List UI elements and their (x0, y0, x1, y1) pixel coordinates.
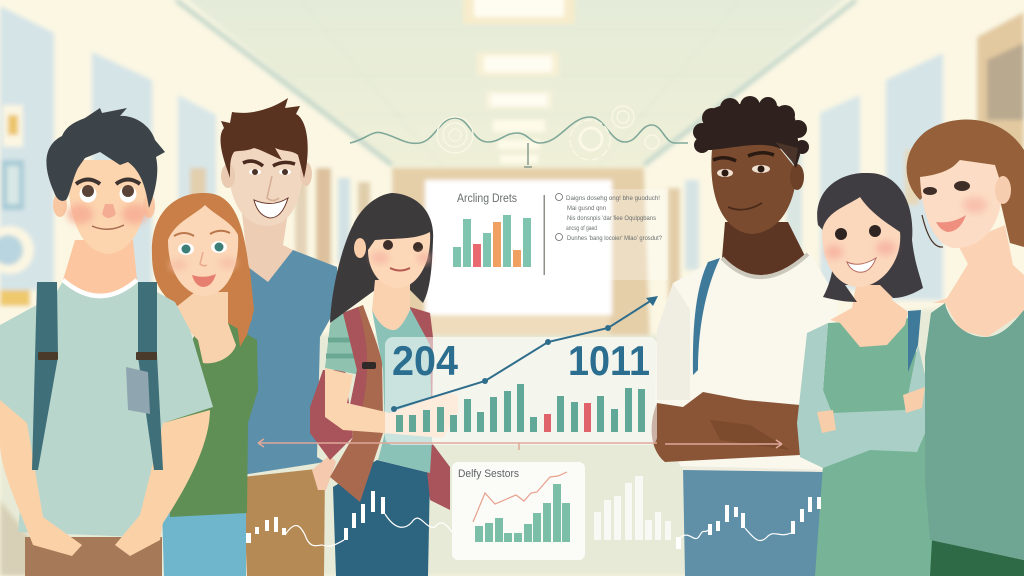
whiteboard notes list: Daigns dosehg ong! bhe guoduch! (566, 195, 660, 202)
glass data panel with bars and trend line (385, 296, 658, 445)
red axis arrows (258, 439, 782, 450)
person: dark-skinned man with crossed arms (652, 96, 838, 576)
whiteboard notes list: Mai gusnd qnn (567, 205, 606, 212)
hallway wave line with circle icons (350, 106, 688, 167)
curly hair (693, 96, 809, 168)
small chart card: Delfy Sestors: Delfy Sestors (458, 468, 519, 480)
small chart card: Delfy Sestors (452, 462, 585, 560)
white bars beside the card (594, 476, 671, 540)
value: 1011: 1011 (568, 337, 650, 384)
bar chart (396, 384, 645, 432)
trend line arrow (391, 296, 658, 412)
white candlestick trace left (246, 491, 452, 546)
person: girl with red backpack (310, 193, 458, 576)
chart title: Arcling Drets (457, 193, 517, 205)
white candlestick trace right (676, 497, 821, 549)
person: girl in green dress (797, 173, 940, 576)
person: tall man in blue shirt (221, 98, 339, 576)
whiteboard notes list: Dunhes 'bang locoier' Mlao' grosdut? (567, 235, 662, 242)
whiteboard notes list: Nis donsnpis 'dar fiee Oqulpgbans (567, 215, 657, 222)
person: woman with auburn bob in green top (907, 120, 1024, 576)
person: dark-haired boy with backpack (0, 108, 213, 576)
whiteboard chart (453, 193, 531, 267)
person: red-haired girl in green top (152, 193, 258, 576)
whiteboard notes list: ancsg of gaed (566, 225, 597, 232)
value: 204: 204 (392, 337, 459, 384)
whiteboard notes list (544, 189, 668, 280)
